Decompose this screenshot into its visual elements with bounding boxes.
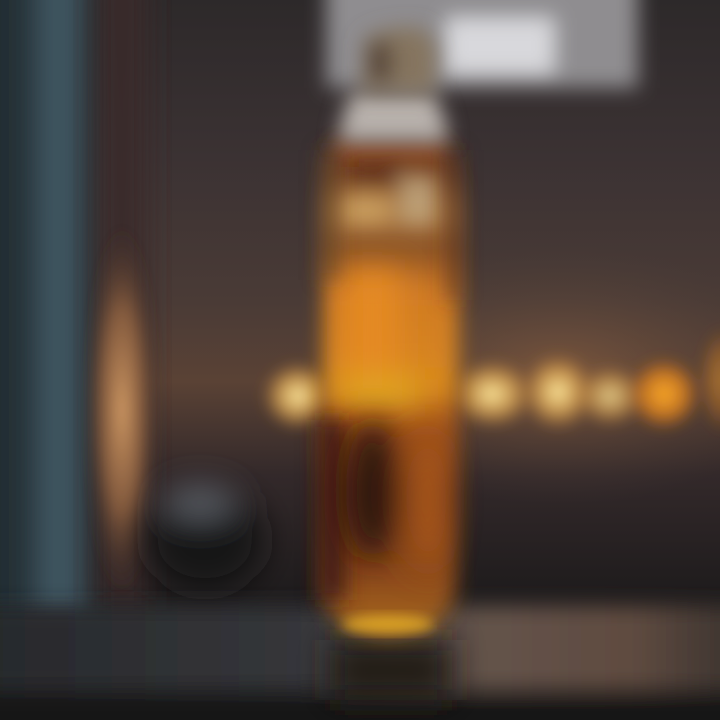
dark object in background bbox=[147, 484, 263, 590]
bottle body bbox=[324, 140, 460, 636]
side glow on the left bbox=[86, 225, 158, 595]
base glow bbox=[342, 615, 434, 633]
cork cap bbox=[362, 28, 436, 92]
white neck bbox=[338, 92, 448, 142]
bright mid highlight bbox=[340, 270, 420, 406]
light haze behind bottle bbox=[320, 245, 720, 505]
brown strip beside column bbox=[100, 0, 145, 610]
table surface bbox=[0, 606, 720, 720]
bottle reflection on table bbox=[330, 640, 452, 700]
dark bottle edges bbox=[318, 150, 460, 600]
window in upper background bbox=[326, 0, 638, 88]
dark lower core bbox=[346, 420, 446, 570]
left blue column bbox=[0, 0, 100, 620]
upper liquid patches bbox=[340, 165, 438, 225]
row of glowing lights bbox=[260, 325, 720, 435]
bottle bbox=[318, 28, 460, 636]
